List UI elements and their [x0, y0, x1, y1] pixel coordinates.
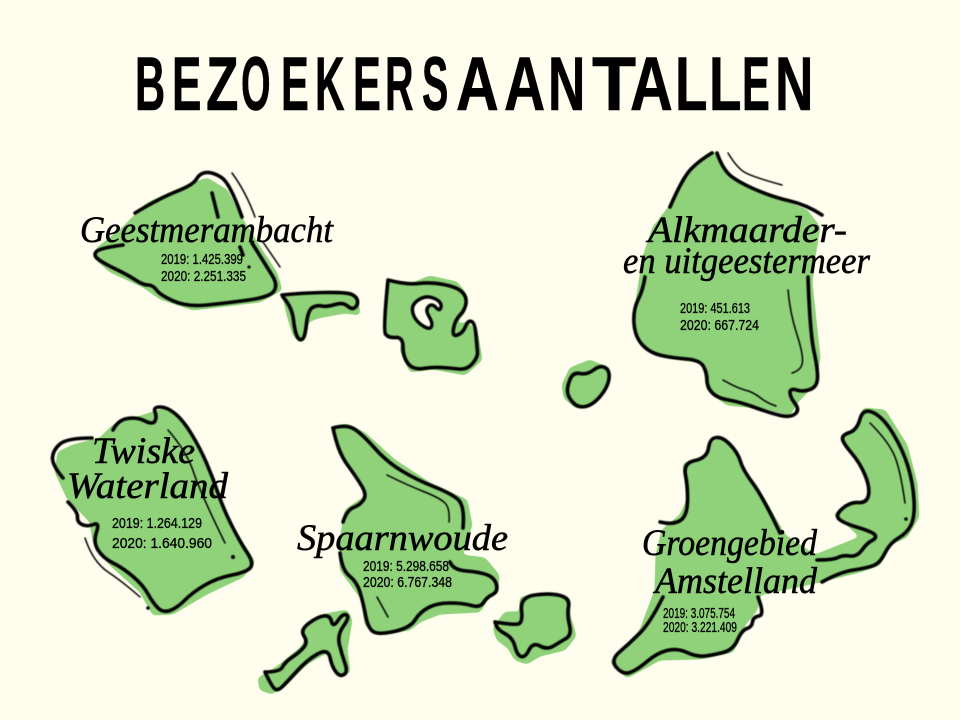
visitor numbers: Spaarnwoude: 2020: 6.767.348 — [363, 575, 452, 591]
panel: Twiske-Waterland — [52, 407, 255, 615]
heading: Spaarnwoude: Spaarnwoude — [297, 518, 508, 559]
map: narrow lake bottom left — [258, 610, 352, 694]
title: R — [385, 41, 414, 126]
visitor numbers: Geestmerambacht — [161, 252, 246, 285]
title: A — [630, 42, 673, 127]
title: A — [456, 42, 499, 127]
map: Geestmerambacht main area — [93, 172, 282, 310]
title: E — [353, 41, 381, 126]
heading: Twiske-Waterland: Twiske — [92, 431, 195, 472]
title: E — [281, 41, 309, 126]
heading: Alkmaarder- en uitgeestermeer: en uitgeestermeer — [623, 241, 871, 282]
title: E — [742, 41, 770, 126]
heading: Twiske-Waterland: Waterland — [67, 466, 229, 507]
title: K — [315, 42, 345, 126]
heading: Alkmaarder- en uitgeestermeer — [623, 210, 871, 282]
map: bean-shaped lake — [562, 360, 610, 408]
visitor numbers: Alkmaarder- en Uitgeestermeer: 2019: 451.613 — [680, 301, 750, 317]
title: N — [775, 42, 813, 126]
title — [135, 41, 813, 127]
title: Z — [206, 42, 238, 126]
map: lake with island — [384, 276, 482, 375]
map: Twiske-Waterland area — [52, 407, 255, 615]
map: Alkmaarder- en Uitgeestermeer area — [634, 150, 822, 416]
title: L — [709, 42, 741, 126]
panel: Spaarnwoude — [297, 424, 508, 635]
visitor numbers: Spaarnwoude — [363, 559, 452, 591]
map: Groengebied Amstelland area — [610, 408, 919, 678]
visitor numbers: Twiske-Waterland: 2020: 1.640.960 — [112, 536, 212, 552]
visitor numbers: Groengebied Amstelland: 2020: 3.221.409 — [663, 620, 737, 636]
heading: Geestmerambacht: Geestmerambacht — [80, 210, 335, 251]
visitor numbers: Alkmaarder- en Uitgeestermeer — [680, 301, 759, 334]
title: B — [135, 41, 165, 126]
visitor numbers: Groengebied Amstelland — [663, 606, 737, 636]
heading: Alkmaarder- en uitgeestermeer: Alkmaarder- — [645, 210, 847, 251]
panel: Alkmaarder- en Uitgeestermeer — [623, 150, 871, 416]
heading: Groengebied Amstelland: Groengebied — [642, 523, 817, 564]
visitor numbers: Geestmerambacht: 2019: 1.425.399 — [161, 252, 243, 268]
title: A — [504, 42, 545, 127]
title: N — [548, 41, 585, 126]
visitor numbers: Groengebied Amstelland: 2019: 3.075.754 — [663, 606, 735, 622]
title: T — [592, 41, 636, 126]
visitor numbers: Spaarnwoude: 2019: 5.298.658 — [363, 559, 449, 575]
visitor numbers: Twiske-Waterland: 2019: 1.264.129 — [112, 516, 202, 532]
heading: Groengebied Amstelland: Amstelland — [652, 561, 817, 602]
map: small T-shaped lake — [282, 292, 360, 343]
title: L — [675, 42, 707, 126]
title: O — [241, 42, 271, 126]
visitor numbers: Geestmerambacht: 2020: 2.251.335 — [161, 269, 246, 285]
map: lake right of Spaarnwoude — [493, 593, 576, 664]
visitor numbers: Alkmaarder- en Uitgeestermeer: 2020: 667.724 — [680, 318, 759, 334]
title: E — [172, 43, 201, 127]
panel: Geestmerambacht — [80, 172, 335, 310]
title: S — [422, 41, 448, 126]
heading: Twiske-Waterland — [67, 431, 229, 507]
map: Spaarnwoude area — [333, 424, 499, 635]
heading: Groengebied Amstelland — [642, 523, 817, 602]
visitor numbers: Twiske-Waterland — [112, 516, 212, 552]
panel: Groengebied Amstelland — [610, 408, 919, 678]
